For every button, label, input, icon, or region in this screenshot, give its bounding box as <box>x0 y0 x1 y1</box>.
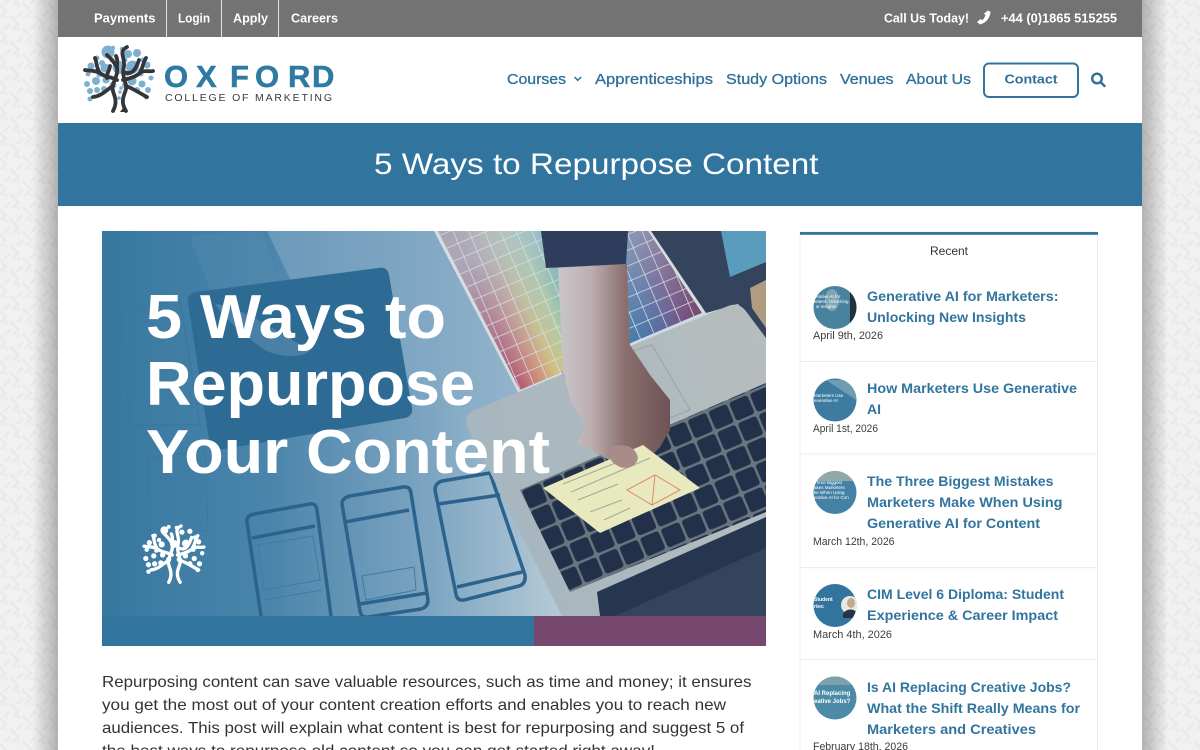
logo: Oxford College of Marketing: OXFORD <box>164 59 334 94</box>
main navigation: Study Options <box>726 71 827 88</box>
post 3: akes Marketers <box>814 485 846 490</box>
post 3: The Three Biggest Mistakes <box>867 473 1054 489</box>
top utility bar: Login <box>178 12 210 26</box>
post 1: erative AI for <box>815 294 841 299</box>
top utility bar: Payments <box>94 12 156 26</box>
wireframe phones <box>247 473 525 617</box>
post 5: What the Shift Really Means for <box>867 700 1081 716</box>
post 1: Generative AI for Marketers: <box>867 288 1058 304</box>
hero title: Repurpose <box>146 350 475 419</box>
post 3: ke When Using <box>814 490 845 495</box>
post 2: Marketers Use <box>814 393 844 398</box>
top utility bar: +44 (0)1865 515255 <box>1001 12 1117 26</box>
post 2: AI <box>867 401 881 417</box>
icon: white tree logo <box>143 525 204 582</box>
hero image <box>102 231 766 646</box>
post 3: Three Biggest <box>814 480 843 485</box>
post 3: March 12th, 2026 <box>813 536 894 548</box>
post 5: AI Replacing <box>814 691 851 697</box>
laptop hinge <box>597 517 766 616</box>
title banner <box>58 123 1142 206</box>
icon: chevron <box>574 77 581 80</box>
sticky note <box>543 445 700 533</box>
post 4: CIM Level 6 Diploma: Student <box>867 586 1064 602</box>
keyboard <box>520 383 766 592</box>
post 2: enerative AI <box>814 398 838 403</box>
post 1: April 9th, 2026 <box>813 330 883 342</box>
post 4: ries: <box>814 604 825 610</box>
post 5 <box>813 676 1081 750</box>
hero title: 5 Ways to <box>146 283 446 352</box>
arm and hand <box>558 264 670 468</box>
laptop body <box>466 305 766 616</box>
main navigation: Apprenticeships <box>595 71 713 88</box>
dark desk, top right <box>651 231 766 340</box>
post 2: How Marketers Use Generative <box>867 380 1077 396</box>
main navigation: Venues <box>840 71 894 88</box>
tablet <box>188 268 412 449</box>
intro paragraph: Repurposing content can save valuable resources, such as time and money; it ensures <box>102 674 752 691</box>
main navigation: Courses <box>507 71 566 88</box>
post 2 <box>813 378 1077 435</box>
sheet of paper, top <box>267 231 518 404</box>
sleeve <box>541 231 628 268</box>
post 3 <box>813 470 1062 548</box>
post 1: w Insights <box>816 304 837 309</box>
icon: phone <box>977 10 990 24</box>
bottom strip purple <box>534 616 766 646</box>
hero title <box>146 283 550 487</box>
icon: tree <box>84 46 154 112</box>
hero title: Your Content <box>146 418 550 487</box>
main navigation: About Us <box>906 71 971 88</box>
post 5: Is AI Replacing Creative Jobs? <box>867 679 1071 695</box>
intro paragraph <box>102 674 752 750</box>
post 1: Unlocking New Insights <box>867 309 1026 325</box>
post 4: Experience & Career Impact <box>867 607 1058 623</box>
colour palette card <box>434 231 706 394</box>
sidebar: recent posts <box>800 232 1098 750</box>
pen and hand ghost <box>190 232 300 357</box>
logo: Oxford College of Marketing: COLLEGE OF MARKETING <box>165 92 332 104</box>
intro paragraph: you get the most out of your content creation efforts and enables you to reach new <box>102 697 726 714</box>
intro paragraph: audiences. This post will explain what content is best for repurposing and suggest 5 of <box>102 720 745 737</box>
post 3: Marketers Make When Using <box>867 494 1062 510</box>
post 5: Marketers and Creatives <box>867 721 1036 737</box>
bottom strip blue <box>102 616 534 646</box>
post 4: March 4th, 2026 <box>813 629 892 641</box>
main navigation <box>507 64 1104 97</box>
post 2: April 1st, 2026 <box>813 423 878 435</box>
post 1: keters: Unlocking <box>814 299 849 304</box>
post 4 <box>813 584 1064 641</box>
sidebar heading: Recent <box>930 246 969 258</box>
contact button: Contact <box>1004 72 1058 86</box>
icon: search <box>1092 74 1104 86</box>
top utility bar: Apply <box>233 12 268 26</box>
post 3: erative AI for Con <box>814 495 849 500</box>
top utility bar: Careers <box>291 12 338 26</box>
title banner: 5 Ways to Repurpose Content <box>374 148 819 181</box>
phone outlines on left <box>120 300 200 425</box>
post 4: Student <box>814 597 833 603</box>
post 1 <box>813 285 1058 342</box>
logo: Oxford College of Marketing <box>84 46 334 112</box>
contact button <box>984 64 1078 97</box>
top utility bar <box>58 0 1142 37</box>
thumb <box>608 445 638 468</box>
top utility bar: Call Us Today! <box>884 12 969 26</box>
post 3: Generative AI for Content <box>867 515 1040 531</box>
post 5: eative Jobs? <box>814 699 851 705</box>
